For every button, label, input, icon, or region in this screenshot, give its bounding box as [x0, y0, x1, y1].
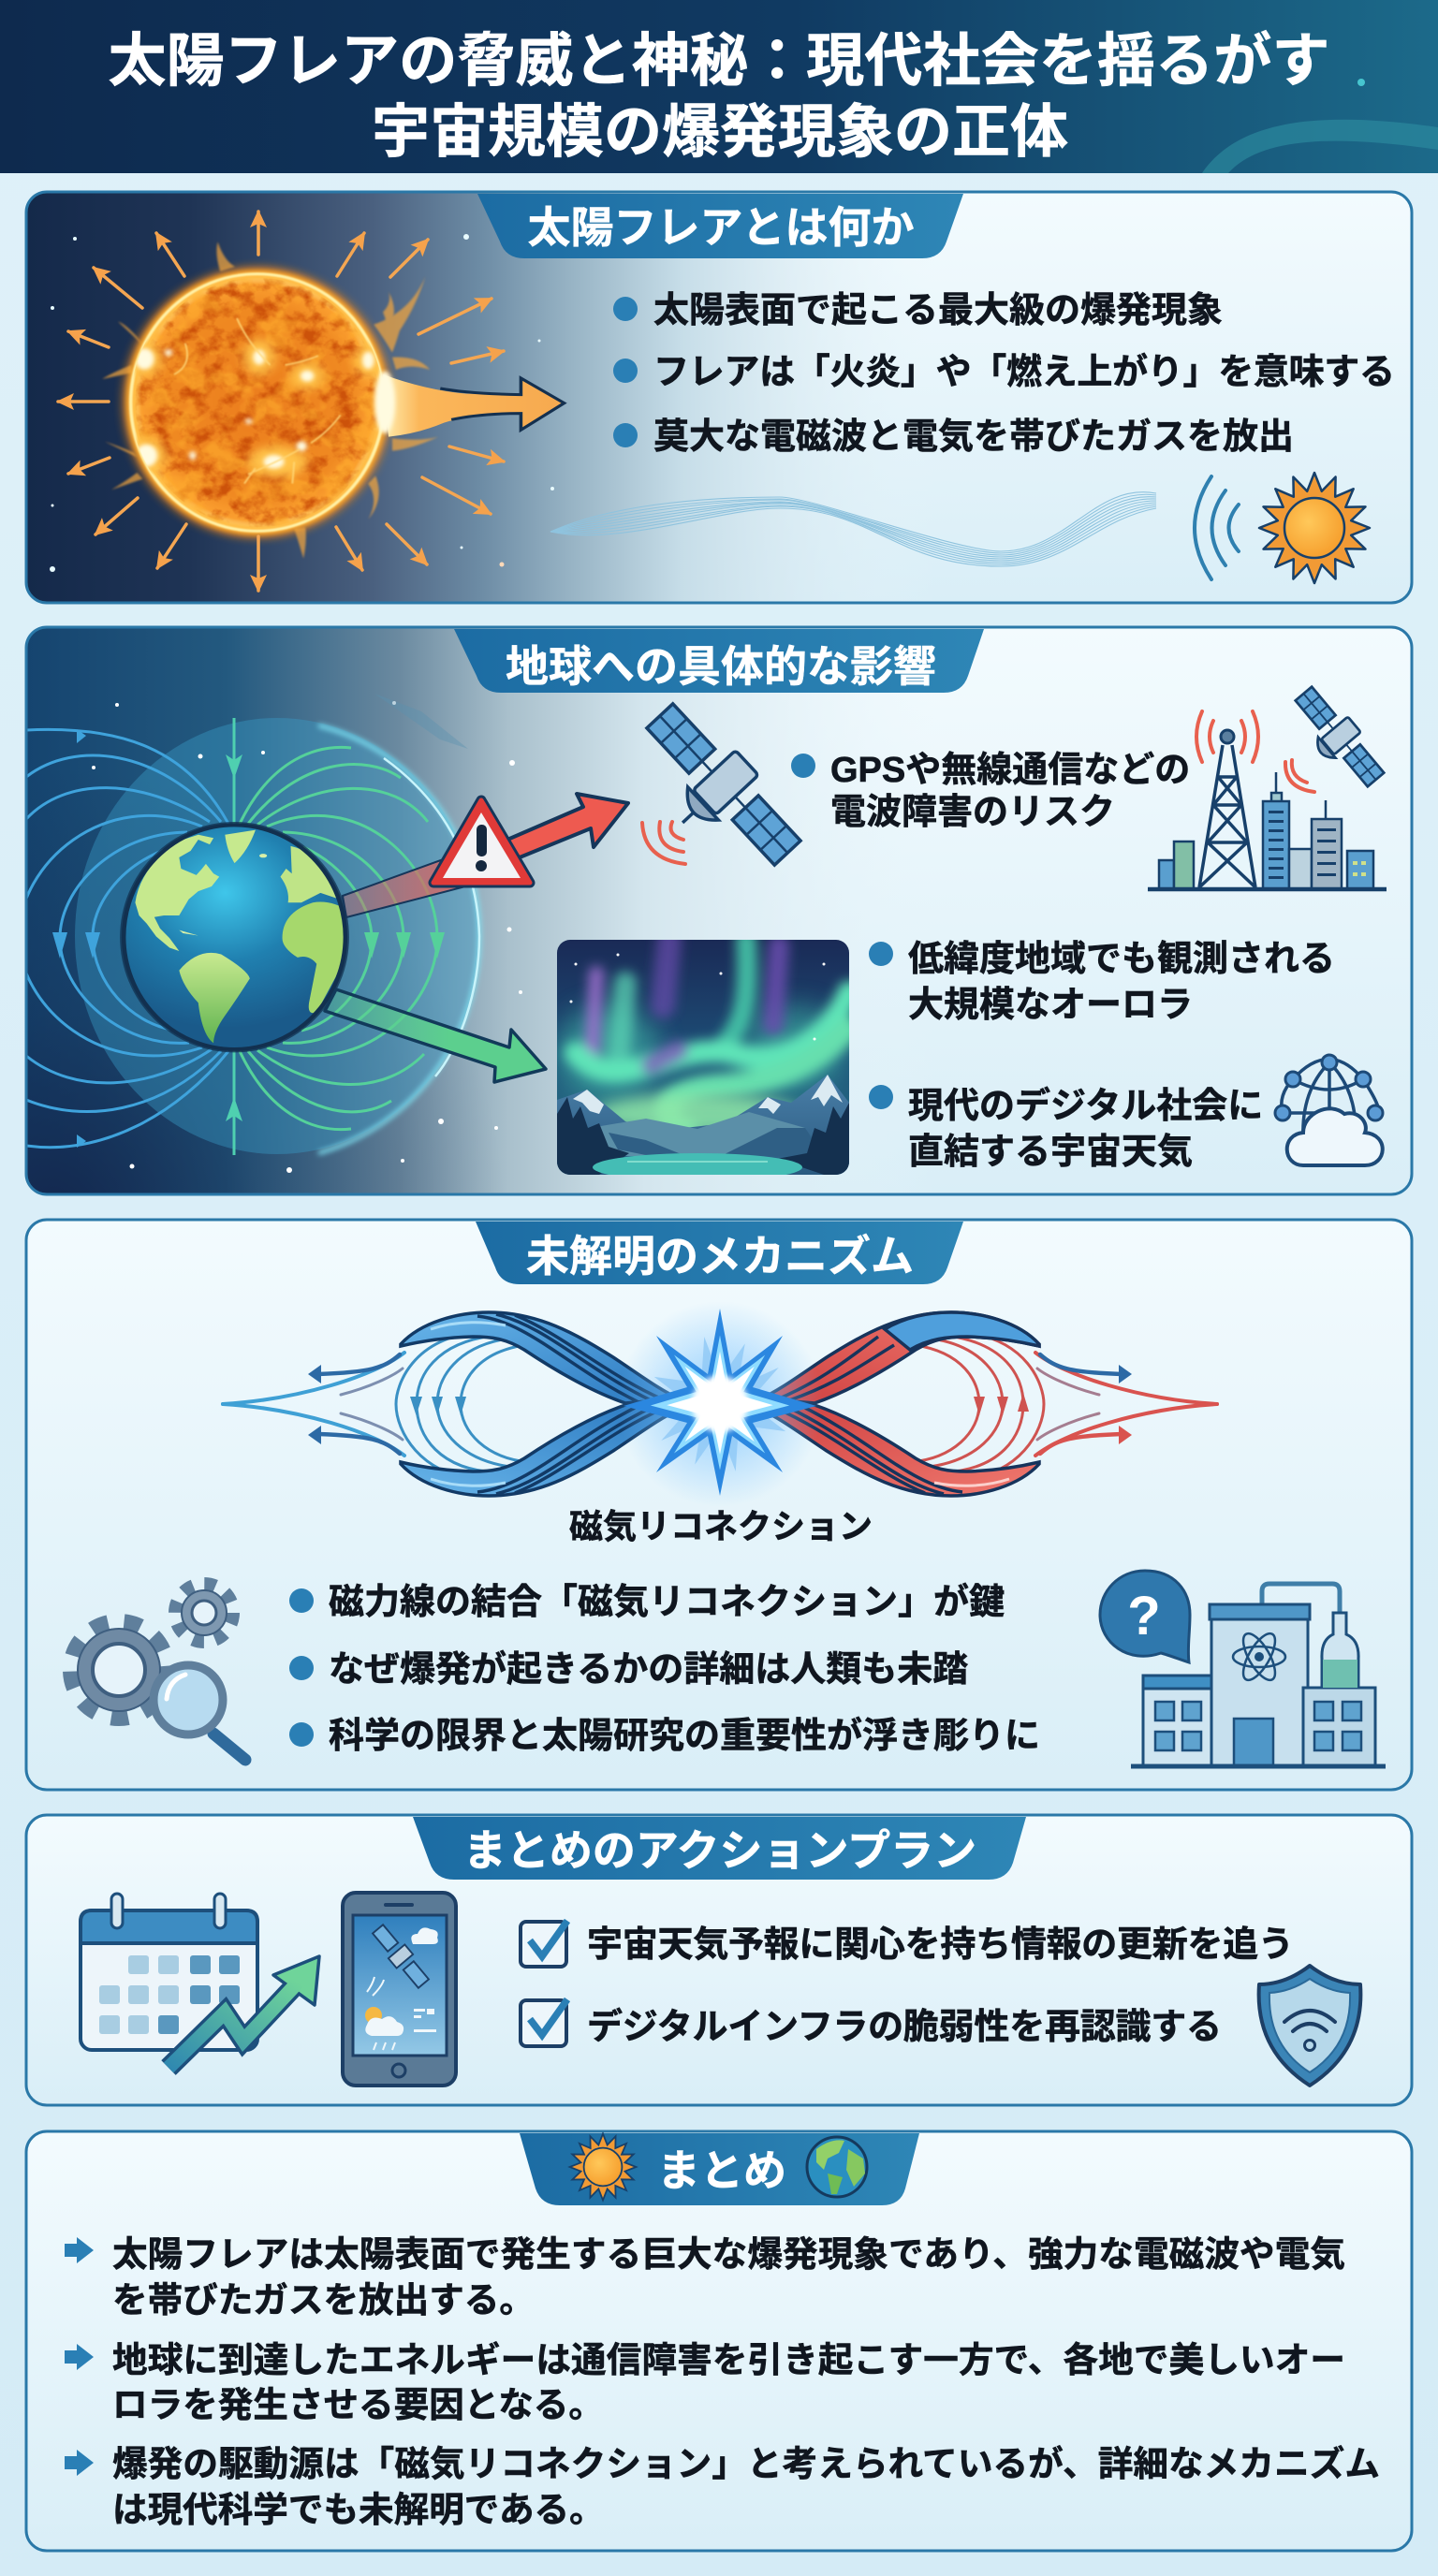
heading tab: 未解明のメカニズム: [526, 1232, 914, 1281]
icon: tower and city with satellite: [1148, 681, 1390, 889]
magnetic field diagram: [19, 694, 522, 1173]
panel: action plan: [26, 1815, 1412, 2105]
summary item 3: は現代科学でも未解明である。: [112, 2490, 605, 2529]
bullets: definition: [613, 291, 1395, 457]
diagram: magnetic reconnection: [223, 1301, 1217, 1507]
heading tab: [477, 194, 963, 258]
bullets: definition: 莫大な電磁波と電気を帯びたガスを放出: [653, 417, 1294, 457]
summary item 1: を帯びたガスを放出する。: [112, 2280, 535, 2320]
icon: sun with flare: [102, 242, 565, 559]
summary item 2: [65, 2340, 1345, 2424]
summary item 2: 地球に到達したエネルギーは通信障害を引き起こす一方で、各地で美しいオー: [112, 2340, 1345, 2379]
bullets: mechanism: 磁力線の結合「磁気リコネクション」が鍵: [329, 1583, 1005, 1622]
icon: smartphone with space weather: [343, 1893, 456, 2086]
checklist: 宇宙天気予報に関心を持ち情報の更新を追う: [587, 1925, 1294, 1965]
bullet: radio interference: GPSや無線通信などの: [830, 751, 1190, 790]
twisted red field bands: [761, 1312, 1039, 1496]
heading tab: [413, 1817, 1026, 1880]
icon: sun emitting waves: [1195, 473, 1370, 583]
arrow: green aurora arrow: [325, 989, 546, 1082]
electromagnetic wave: [550, 492, 1156, 566]
icon: satellite: [619, 695, 811, 891]
header banner: [0, 0, 1438, 173]
twisted blue field bands: [401, 1312, 679, 1496]
label: magnetic reconnection: 磁気リコネクション: [569, 1507, 873, 1545]
heading tab: [520, 2133, 919, 2205]
icon: Earth globe: [120, 822, 351, 1052]
bullet: low-latitude aurora: 低緯度地域でも観測される: [908, 940, 1335, 979]
bullets: mechanism: [289, 1583, 1040, 1756]
panel: effects on Earth: [19, 627, 1412, 1194]
checklist: デジタルインフラの脆弱性を再認識する: [587, 2007, 1222, 2047]
bullet: radio interference: [791, 751, 1190, 832]
icon: gears and magnifier: [74, 1587, 245, 1760]
heading tab: 太陽フレアとは何か: [527, 203, 915, 252]
icon: laboratory with question bubble: [1100, 1571, 1386, 1766]
panel: unsolved mechanism: [26, 1220, 1412, 1790]
icon: network globe and cloud: [1275, 1055, 1383, 1165]
icon: warning triangle: [433, 800, 530, 883]
bullet: radio interference: 電波障害のリスク: [830, 793, 1115, 832]
heading tab: [454, 629, 984, 693]
reconnection burst: [617, 1301, 823, 1507]
title: 太陽フレアの脅威と神秘：現代社会を揺るがす: [109, 29, 1329, 94]
bullets: definition: 太陽表面で起こる最大級の爆発現象: [653, 291, 1223, 330]
summary item 3: [65, 2444, 1380, 2529]
icon: calendar with rising arrow: [81, 1894, 319, 2068]
heading tab: まとめのアクションプラン: [463, 1826, 976, 1875]
arrow: red risk arrow: [343, 794, 628, 917]
bullets: definition: フレアは「火炎」や「燃え上がり」を意味する: [653, 353, 1395, 392]
arrow: main flare jet: [374, 372, 565, 437]
bullet: space weather and digital society: [869, 1085, 1263, 1172]
bullet: low-latitude aurora: 大規模なオーロラ: [908, 986, 1193, 1025]
icon: small earth: [807, 2137, 867, 2197]
bullet: space weather and digital society: 現代のデジタル社会に: [908, 1086, 1263, 1126]
summary item 1: [65, 2234, 1345, 2320]
heading tab: 地球への具体的な影響: [506, 642, 936, 691]
bullet: low-latitude aurora: [869, 940, 1335, 1025]
panel: what is a solar flare: [26, 192, 1412, 603]
summary item 1: 太陽フレアは太陽表面で発生する巨大な爆発現象であり、強力な電磁波や電気: [112, 2234, 1345, 2274]
icon: laboratory with question bubble: ?: [1127, 1586, 1161, 1647]
title: [109, 29, 1329, 165]
heading tab: まとめ: [657, 2146, 786, 2195]
panel: summary: [26, 2131, 1412, 2551]
icon: small sun: [570, 2134, 636, 2200]
icon: wifi shield: [1259, 1966, 1360, 2086]
summary item 2: ロラを発生させる要因となる。: [112, 2385, 604, 2424]
radial arrows around the sun: [58, 212, 504, 591]
bullets: mechanism: 科学の限界と太陽研究の重要性が浮き彫りに: [329, 1717, 1040, 1756]
bullet: space weather and digital society: 直結する宇宙天気: [908, 1133, 1193, 1172]
bullets: mechanism: なぜ爆発が起きるかの詳細は人類も未踏: [329, 1650, 968, 1690]
title: 宇宙規模の爆発現象の正体: [372, 100, 1068, 165]
heading tab: [476, 1222, 963, 1284]
image: aurora over mountains: [557, 940, 849, 1181]
summary item 3: 爆発の駆動源は「磁気リコネクション」と考えられているが、詳細なメカニズム: [112, 2444, 1380, 2483]
checklist: [521, 1921, 1294, 2047]
